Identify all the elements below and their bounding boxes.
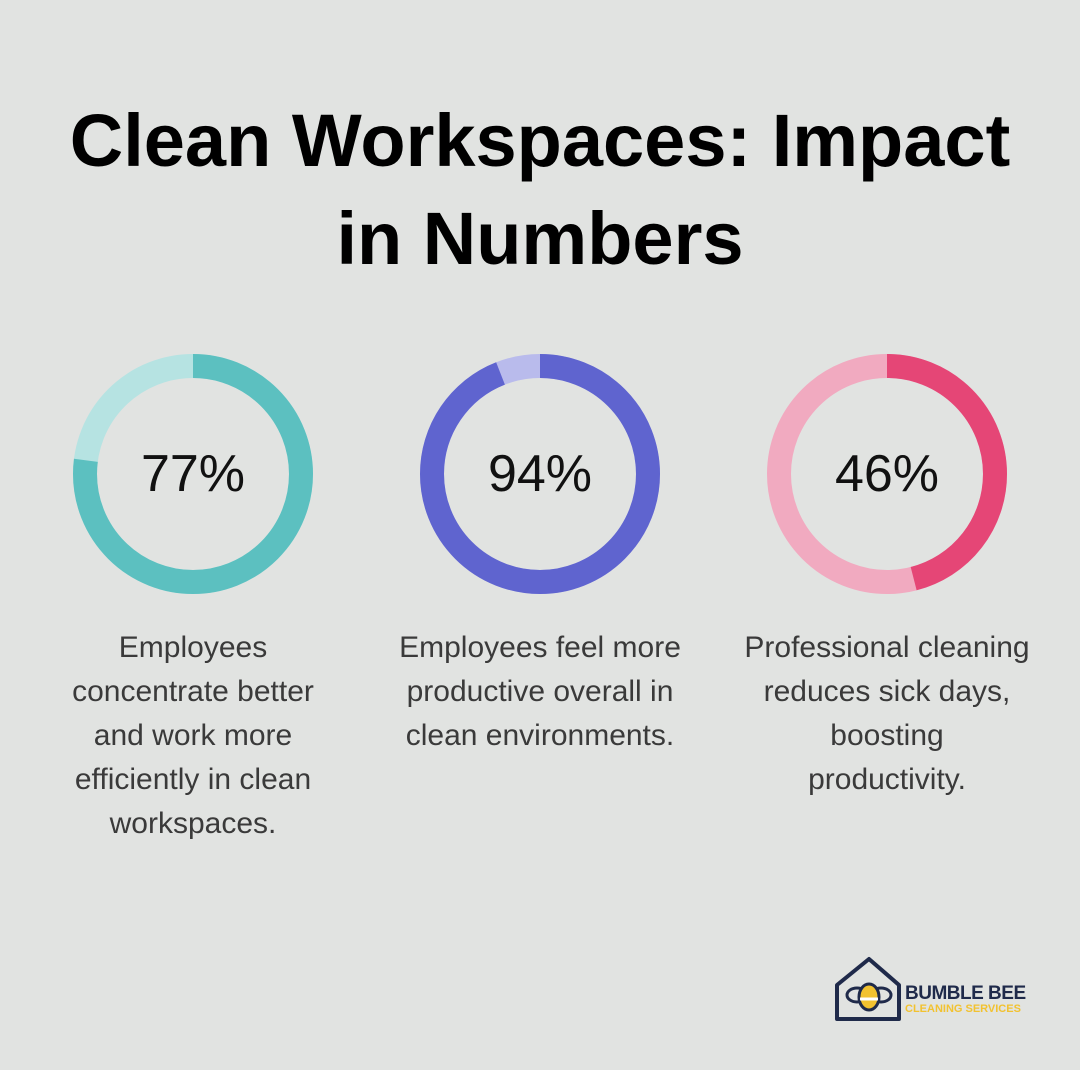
logo: CLEANING SERVICES	[905, 1003, 1021, 1015]
text: 77%: workspaces.	[110, 807, 276, 840]
ring: 46%: 46%	[835, 445, 939, 503]
ring: 46%	[767, 354, 1007, 594]
text: 94%: productive overall in	[407, 675, 673, 708]
ring: 94%: 94%	[488, 445, 592, 503]
text: 46%	[744, 631, 1030, 796]
text: 46%: Professional cleaning	[744, 631, 1030, 664]
text: 46%: reduces sick days,	[764, 675, 1010, 708]
text: 94%: Employees feel more	[399, 631, 681, 664]
text: 77%: efficiently in clean	[75, 763, 311, 796]
text: 77%: and work more	[94, 719, 292, 752]
text: 46%: boosting	[830, 719, 944, 752]
ring: 77%	[73, 354, 313, 594]
text: 77%: concentrate better	[72, 675, 314, 708]
logo: BUMBLE BEE	[905, 983, 1026, 1004]
text: 46%: productivity.	[808, 763, 966, 796]
logo	[835, 956, 1026, 1021]
text: 77%	[72, 631, 314, 840]
title: Clean Workspaces: Impact	[70, 99, 1010, 182]
ring: 77%: 77%	[141, 445, 245, 503]
text: 94%: clean environments.	[406, 719, 674, 752]
title	[70, 99, 1010, 280]
text: 94%	[399, 631, 681, 752]
ring: 94%	[420, 354, 660, 594]
title: in Numbers	[336, 197, 744, 280]
text: 77%: Employees	[119, 631, 267, 664]
